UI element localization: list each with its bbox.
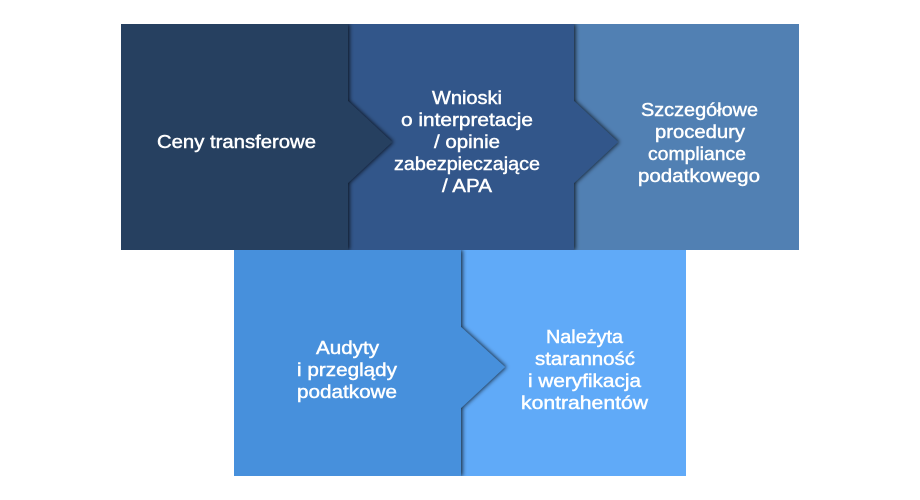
panel: due diligence [461, 250, 686, 476]
text: due diligence: staranność [535, 349, 635, 369]
text: compliance procedures: podatkowego [638, 166, 760, 186]
text: due diligence: Należyta [546, 327, 624, 347]
text: tax audits [297, 338, 397, 402]
text: due diligence [521, 327, 649, 413]
text: due diligence: i weryfikacja [528, 371, 642, 391]
panel: transfer pricing with arrow [121, 24, 392, 250]
text: tax audits: podatkowe [297, 382, 397, 402]
text: compliance procedures [638, 100, 760, 186]
text: compliance procedures: procedury [655, 122, 745, 142]
panel: rulings and APA with arrow [348, 24, 618, 250]
text: transfer pricing: Ceny transferowe [157, 132, 316, 152]
panel: compliance procedures [574, 24, 799, 250]
text: rulings and APA: / APA [442, 176, 492, 196]
text: rulings and APA: o interpretacje [401, 110, 533, 130]
text: compliance procedures: Szczegółowe [641, 100, 758, 120]
panel: tax audits with arrow [234, 250, 505, 476]
process diagram [121, 24, 799, 476]
text: compliance procedures: compliance [648, 144, 746, 164]
text: rulings and APA: Wnioski [432, 88, 502, 108]
text: tax audits: Audyty [316, 338, 379, 358]
text: rulings and APA: zabezpieczające [394, 154, 540, 174]
text: rulings and APA [394, 88, 540, 196]
text: rulings and APA: / opinie [434, 132, 500, 152]
text: tax audits: i przeglądy [297, 360, 397, 380]
text: due diligence: kontrahentów [521, 393, 649, 413]
